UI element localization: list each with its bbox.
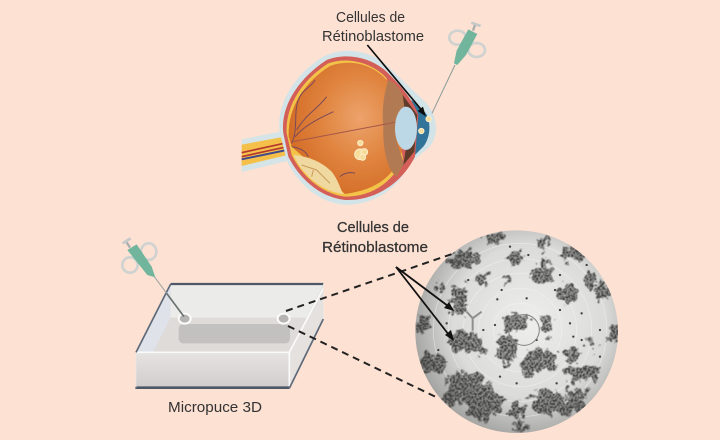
- sphere micrograph: [415, 230, 618, 433]
- optic nerve: [242, 131, 293, 172]
- cell clusters: [417, 234, 618, 431]
- chip left face: [136, 284, 171, 386]
- label: eye cells second line: Rétinoblastome: [322, 29, 424, 45]
- syringe: [122, 238, 184, 317]
- aqueous chamber: [408, 100, 429, 162]
- retinal detachment area: [293, 155, 343, 194]
- label: eye cells: Cellules de: [336, 10, 405, 26]
- optical axis: [293, 122, 395, 142]
- blood vessels: [292, 80, 355, 177]
- lens: [395, 107, 417, 150]
- central ring: [509, 315, 539, 345]
- tumour cells: [355, 116, 431, 160]
- vitreous body: [289, 63, 403, 194]
- tree-shaped cell strand: [467, 312, 482, 331]
- chip top face: [136, 284, 323, 352]
- pointer arrow: [367, 45, 426, 117]
- sphere base: [415, 230, 618, 433]
- label: chip: Micropuce 3D: [168, 400, 262, 416]
- microchip: [122, 238, 323, 388]
- chip ports: [179, 314, 290, 324]
- chip back wall lower band: [136, 318, 323, 352]
- red choroid layer: [283, 56, 418, 200]
- chip right face: [289, 284, 323, 388]
- sclera outer layer: [279, 51, 436, 205]
- eye illustration: [242, 23, 485, 205]
- isolated cells: [437, 245, 601, 384]
- syringe: [432, 23, 485, 113]
- label: sphere cells: Cellules de: [337, 219, 409, 236]
- yellow retina layer: [287, 60, 403, 197]
- dashed connector lines: [286, 253, 455, 397]
- chip front face: [136, 352, 289, 388]
- chip edges: [135, 284, 323, 388]
- ciliary body: [383, 80, 407, 177]
- pointer arrows to clusters: [396, 267, 454, 341]
- label: sphere cells second line: Rétinoblastome: [322, 239, 428, 256]
- channel: [179, 324, 290, 343]
- iris: [403, 95, 417, 165]
- concentric rings: [433, 243, 607, 417]
